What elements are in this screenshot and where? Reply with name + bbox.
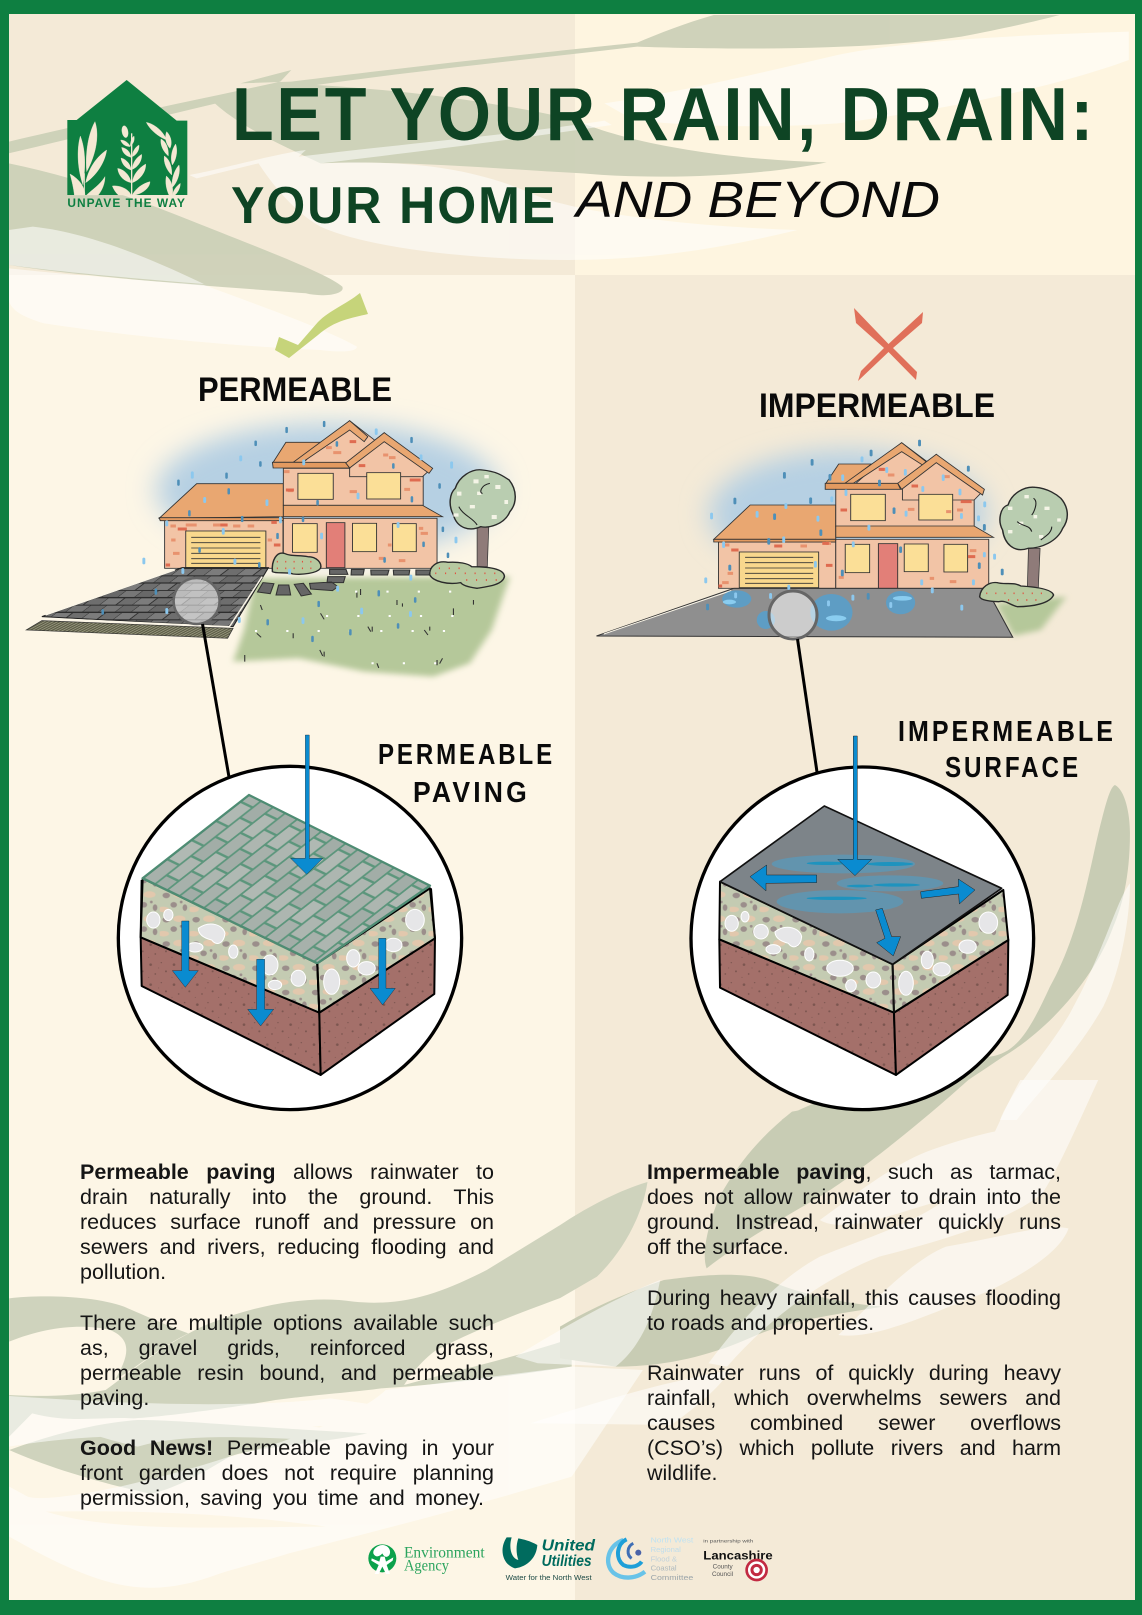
- sky wash: [157, 423, 499, 557]
- sky wash: [709, 450, 986, 577]
- lower left leaves: [9, 1182, 647, 1588]
- magnifier: impermeable driveway: [769, 591, 817, 639]
- gravel layer: [719, 882, 894, 1013]
- tarmac top: [720, 806, 1002, 964]
- text block: impermeable paving: does not allow rainwater to drain into the: [647, 1185, 1061, 1209]
- logo: Environment Agency: [368, 1544, 485, 1575]
- diagram circle: impermeable surface: [691, 736, 1034, 1110]
- raindrops light: [144, 430, 456, 623]
- label: impermeable surface: SURFACE: [945, 752, 1081, 784]
- logo: Lancashire County Council: Lancashire: [703, 1548, 773, 1562]
- puddles: [722, 590, 915, 631]
- lawn patch: [995, 597, 1066, 636]
- bricks: [170, 448, 428, 561]
- logo plants: [70, 122, 180, 195]
- upper storey: [836, 487, 974, 527]
- windows: [292, 473, 416, 552]
- text block: impermeable paving: causes combined sewer overflows: [647, 1411, 1061, 1435]
- bushes right: [430, 562, 504, 588]
- bushes: [980, 583, 1054, 607]
- label: permeable paving: [378, 739, 555, 809]
- magnifier: permeable driveway: [174, 578, 220, 624]
- gravel stones: [725, 911, 998, 995]
- logo: North West Regional Flood and Coastal Committee: Committee: [651, 1573, 693, 1582]
- label: permeable paving: PERMEABLE: [378, 739, 555, 771]
- stepping stones: [257, 569, 430, 596]
- ground floor: [283, 518, 437, 568]
- logo: North West Regional Flood and Coastal Committee: [608, 1536, 694, 1582]
- title line 2: and beyond: AND BEYOND: [573, 171, 940, 228]
- upper storey: [283, 468, 423, 505]
- logo: Lancashire County Council: in partnership with: [703, 1538, 754, 1544]
- logo: Lancashire County Council: County: [713, 1564, 734, 1571]
- soil layer: [719, 882, 1008, 1075]
- text block: permeable paving: as, gravel grids, reinforced grass,: [80, 1336, 494, 1360]
- gravel stones: [147, 909, 424, 994]
- asphalt driveway: [596, 588, 1013, 637]
- text block: permeable paving: front garden does not require planning: [80, 1461, 494, 1485]
- ground floor: [836, 539, 989, 588]
- logo: North West Regional Flood and Coastal Committee: Regional: [651, 1545, 681, 1554]
- text block: impermeable paving: Rainwater runs of quickly during heavy: [647, 1361, 1061, 1385]
- raindrops light: [706, 458, 995, 609]
- diagram circle: permeable paving: [118, 735, 462, 1110]
- text block: permeable paving: pollution.: [80, 1260, 166, 1284]
- raindrops dark: [708, 441, 1002, 609]
- bushes left: [272, 553, 321, 574]
- paving top: [143, 795, 430, 963]
- soil layer: [141, 878, 435, 1075]
- text block: permeable paving: permeable resin bound, and permeable: [80, 1361, 494, 1385]
- tree canopy: [450, 470, 515, 529]
- text block: impermeable paving: (CSO’s) which pollute rivers and harm: [647, 1436, 1061, 1460]
- text block: permeable paving: Good News! Permeable paving in your: [80, 1436, 494, 1460]
- gravel layer: [141, 878, 319, 1013]
- logo: Environment Agency: Agency: [404, 1558, 449, 1575]
- text block: impermeable paving: Impermeable paving, such as tarmac,: [647, 1160, 1061, 1184]
- icon: check mark: [275, 293, 368, 358]
- logo: Lancashire County Council: Council: [712, 1571, 733, 1578]
- lawn: [233, 577, 510, 677]
- text block: permeable paving: permission, saving you time and money.: [80, 1486, 484, 1510]
- arrows: [172, 735, 395, 1026]
- logo: United Utilities: United: [542, 1538, 596, 1555]
- driveway edge: [26, 621, 233, 638]
- text block: impermeable paving: wildlife.: [647, 1461, 718, 1485]
- raindrops dark: [103, 422, 448, 641]
- leader line: permeable: [202, 624, 229, 777]
- bricks: [722, 469, 976, 583]
- text block: permeable paving: Permeable paving allows rainwater to: [80, 1160, 494, 1184]
- title line 2: your home: YOUR HOME: [231, 177, 557, 235]
- logo: North West Regional Flood and Coastal Committee: North West: [651, 1536, 694, 1545]
- text block: permeable paving: drain naturally into the ground. This: [80, 1185, 494, 1209]
- text block: permeable paving: reduces surface runoff and pressure on: [80, 1210, 494, 1234]
- logo: United Utilities: [503, 1537, 596, 1582]
- text block: impermeable paving: off the surface.: [647, 1235, 789, 1259]
- leader line: impermeable: [798, 639, 817, 772]
- water film: [772, 855, 943, 913]
- logo: United Utilities: Water for the North West: [506, 1573, 592, 1582]
- text block: impermeable paving: rainfall, which overwhelms sewers and: [647, 1386, 1061, 1410]
- logo wordmark: UNPAVE THE WAY: [67, 197, 186, 210]
- house: impermeable driveway: [596, 441, 1067, 637]
- logo: Environment Agency: Environment: [404, 1545, 485, 1562]
- tree trunk: [1027, 548, 1040, 588]
- label: impermeable surface: [898, 716, 1116, 784]
- text block: impermeable paving: During heavy rainfall, this causes flooding: [647, 1286, 1061, 1310]
- porch roof: [283, 505, 443, 517]
- text block: permeable paving: There are multiple options available such: [80, 1311, 494, 1335]
- partner logos: [368, 1536, 773, 1582]
- porch roof: [836, 526, 993, 537]
- text block: impermeable paving: [647, 1160, 1061, 1485]
- driveway pavers: [42, 568, 268, 627]
- logo: North West Regional Flood and Coastal Committee: Coastal: [651, 1564, 677, 1573]
- text block: permeable paving: sewers and rivers, reducing flooding and: [80, 1235, 494, 1259]
- logo: Lancashire County Council: [703, 1538, 773, 1580]
- garage: [165, 520, 283, 568]
- garage: [719, 542, 836, 588]
- logo: North West Regional Flood and Coastal Committee: Flood &: [651, 1554, 677, 1563]
- grass tufts: [245, 589, 473, 668]
- label: permeable paving: PAVING: [413, 777, 530, 809]
- heading: impermeable: IMPERMEABLE: [759, 387, 995, 425]
- text block: impermeable paving: to roads and properties.: [647, 1311, 874, 1335]
- text block: impermeable paving: ground. Instread, rainwater quickly runs: [647, 1210, 1061, 1234]
- lower right leaves: [515, 1080, 1098, 1425]
- text block: permeable paving: paving.: [80, 1386, 149, 1410]
- tree trunk: [477, 527, 489, 567]
- door: [878, 544, 898, 588]
- arrows: [750, 736, 975, 956]
- text block: permeable paving: [80, 1160, 494, 1510]
- icon: cross mark: [854, 308, 923, 381]
- windows: [845, 494, 968, 573]
- tree canopy: [1000, 487, 1067, 550]
- house: permeable driveway and lawn: [26, 421, 515, 677]
- heading: permeable: PERMEABLE: [198, 371, 392, 409]
- door: [326, 523, 345, 568]
- logo: Unpave the Way: [67, 80, 187, 210]
- logo: United Utilities: Utilities: [542, 1553, 592, 1570]
